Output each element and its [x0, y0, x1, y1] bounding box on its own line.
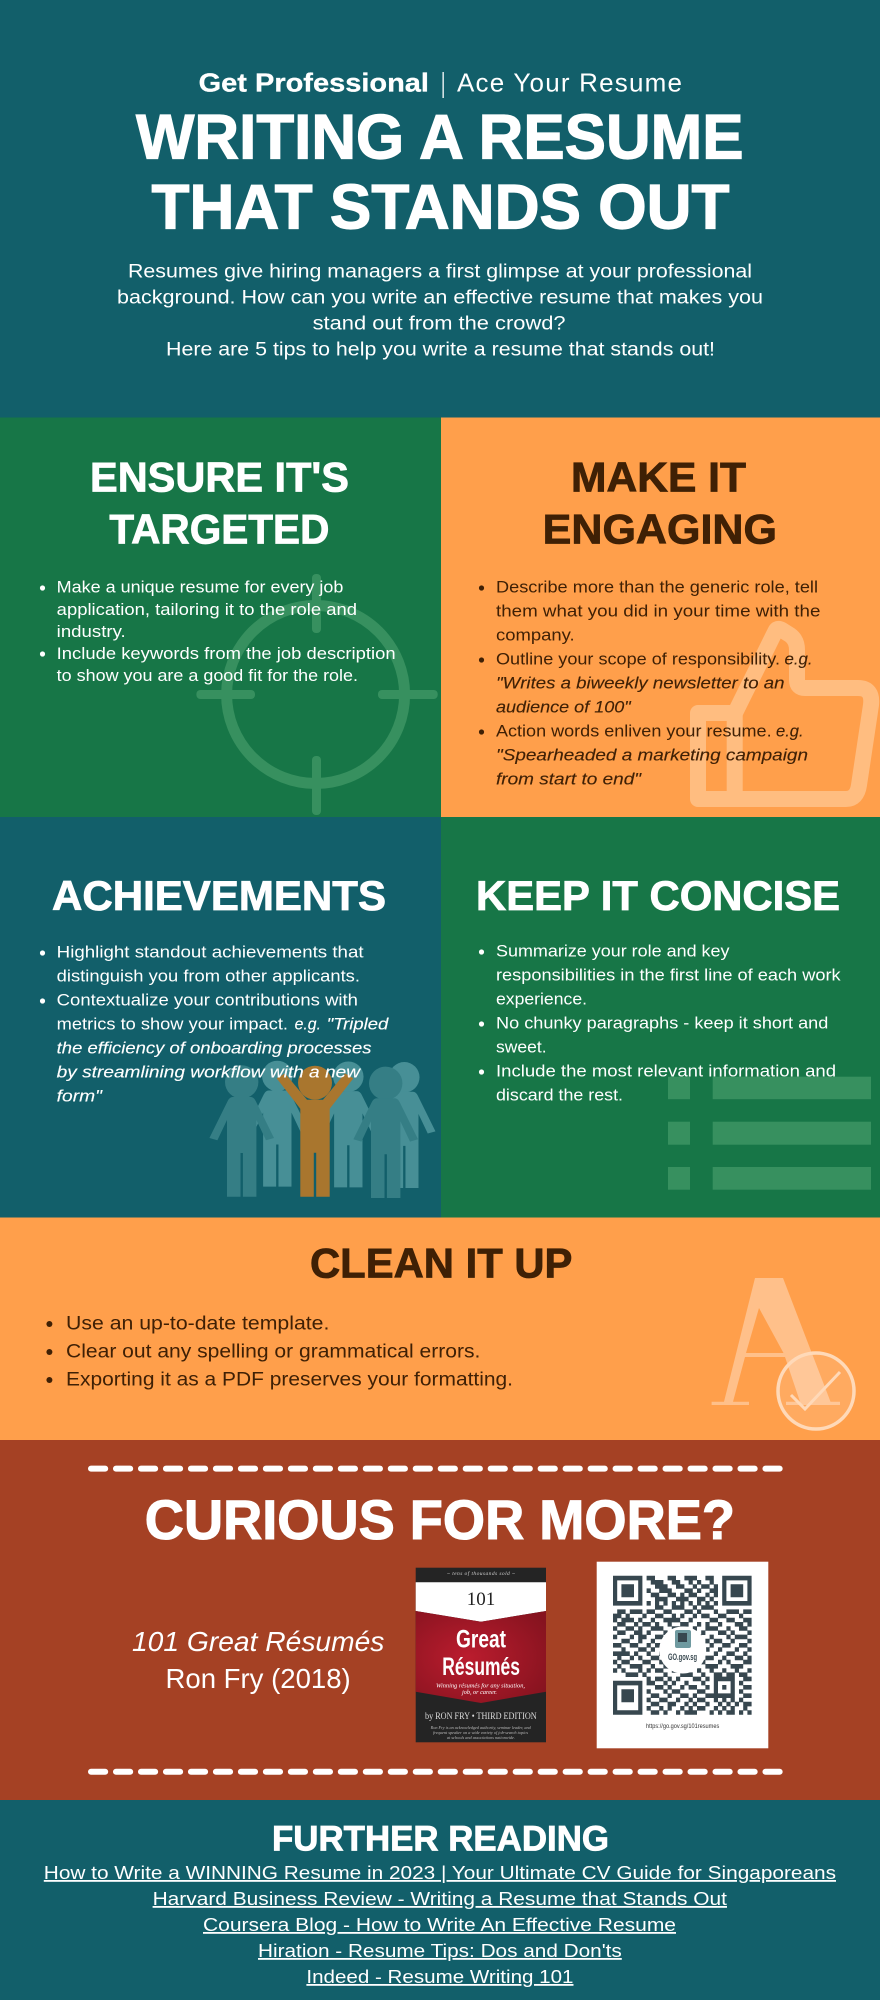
heading: FURTHER READING — [272, 1820, 609, 1859]
panel: make it engaging — [441, 418, 880, 817]
icon: group of people — [209, 1061, 435, 1198]
book cover: 101 — [467, 1589, 495, 1610]
bullet list: discard the rest. — [496, 1087, 623, 1105]
bullet list: by streamlining workflow with a new — [57, 1064, 361, 1082]
QR code card — [597, 1562, 768, 1748]
book cover: at schools and associations nationwide. — [447, 1735, 515, 1740]
bullet list: application, tailoring it to the role and — [57, 601, 357, 619]
links list: Hiration - Resume Tips: Dos and Don'ts — [258, 1941, 622, 1961]
heading: CURIOUS FOR MORE? — [145, 1488, 735, 1551]
panel: keep it concise — [441, 817, 880, 1218]
bullet list — [479, 943, 841, 1105]
links list: How to Write a WINNING Resume in 2023 | Your Ultimate CV Guide for Singaporeans — [44, 1863, 836, 1883]
QR code card: https://go.gov.sg/101resumes — [646, 1724, 719, 1730]
bullet list: industry. — [57, 623, 126, 641]
links list — [44, 1863, 836, 1987]
icon: letter A with check mark — [712, 1278, 854, 1429]
bullet list: Highlight standout achievements that — [57, 944, 364, 962]
kicker: Ace Your Resume — [457, 68, 682, 98]
bullet list: metrics to show your impact. — [57, 1016, 288, 1034]
bullet list: responsibilities in the first line of each work — [496, 967, 841, 985]
title: WRITING A RESUME — [136, 102, 744, 172]
heading: ENGAGING — [543, 505, 777, 552]
bullet list: from start to end" — [496, 771, 642, 789]
title: THAT STANDS OUT — [152, 172, 730, 242]
bullet list: Make a unique resume for every job — [57, 579, 343, 597]
panel: header — [0, 0, 880, 418]
intro text — [117, 262, 763, 360]
bullet list: the efficiency of onboarding processes — [57, 1040, 371, 1058]
heading: KEEP IT CONCISE — [476, 872, 840, 919]
panel: clean it up — [0, 1218, 880, 1440]
bullet list: distinguish you from other applicants. — [57, 968, 360, 986]
book cover: frequent speaker on a wide variety of job-search topics — [433, 1730, 528, 1735]
bullet list: Include keywords from the job description — [57, 645, 396, 663]
bullet list: "Tripled — [327, 1016, 389, 1034]
book cover: job, or career. — [461, 1689, 497, 1696]
bullet list: No chunky paragraphs - keep it short and — [496, 1015, 828, 1033]
book cover: Résumés — [442, 1653, 520, 1681]
bullet list: Include the most relevant information and — [496, 1063, 836, 1081]
heading: CLEAN IT UP — [310, 1240, 572, 1287]
panel: achievements — [0, 817, 441, 1218]
bullet list: Contextualize your contributions with — [57, 992, 358, 1010]
intro text: background. How can you write an effective resume that makes you — [117, 288, 763, 308]
title — [136, 102, 744, 242]
bullet list: Outline your scope of responsibility. — [496, 651, 780, 669]
book cover: ~ tens of thousands sold ~ — [447, 1570, 515, 1577]
book cover — [416, 1568, 546, 1742]
bullet list — [40, 944, 389, 1106]
heading — [543, 454, 777, 552]
links list: Harvard Business Review - Writing a Resume that Stands Out — [153, 1889, 727, 1909]
bullet list: "Writes a biweekly newsletter to an — [496, 675, 784, 693]
intro text: Resumes give hiring managers a first glimpse at your professional — [128, 262, 752, 282]
bullet list — [40, 579, 396, 685]
book cover: by RON FRY • THIRD EDITION — [425, 1711, 537, 1721]
bullet list: experience. — [496, 991, 587, 1009]
bullet list: sweet. — [496, 1039, 547, 1057]
bullet list: Use an up-to-date template. — [66, 1313, 329, 1334]
heading: MAKE IT — [571, 454, 746, 501]
heading: TARGETED — [109, 505, 329, 552]
bullet list: e.g. — [295, 1016, 321, 1034]
bullet list — [46, 1313, 513, 1390]
intro text: Here are 5 tips to help you write a resume that stands out! — [166, 339, 715, 360]
bullet list: "Spearheaded a marketing campaign — [496, 747, 808, 765]
heading: ACHIEVEMENTS — [52, 872, 386, 919]
kicker: Get Professional — [199, 68, 429, 98]
bullet list: e.g. — [776, 723, 804, 741]
bullet list: e.g. — [784, 651, 813, 669]
icon: target — [196, 574, 438, 815]
links list: Coursera Blog - How to Write An Effective Resume — [203, 1915, 676, 1935]
links list: Indeed - Resume Writing 101 — [306, 1967, 574, 1987]
bullet list: Clear out any spelling or grammatical errors. — [66, 1341, 480, 1362]
bullet list: them what you did in your time with the — [496, 603, 820, 621]
bullet list: Action words enliven your resume. — [496, 723, 772, 741]
bullet list: Exporting it as a PDF preserves your formatting. — [66, 1369, 513, 1390]
book citation: Ron Fry (2018) — [166, 1663, 351, 1694]
book cover: Ron Fry is an acknowledged authority, seminar leader, and — [430, 1725, 532, 1731]
QR logo: GO.gov.sg — [668, 1652, 697, 1662]
panel: curious for more — [0, 1440, 880, 1800]
panel: ensure it's targeted — [0, 418, 441, 817]
bullet list: to show you are a good fit for the role. — [57, 667, 358, 685]
heading: ENSURE IT'S — [90, 454, 349, 501]
QR logo — [659, 1626, 706, 1674]
bullet list: form" — [57, 1088, 103, 1106]
icon: list — [668, 1077, 871, 1190]
book citation — [132, 1626, 384, 1694]
icon: thumbs up — [698, 629, 871, 799]
kicker — [199, 68, 682, 98]
book cover: Winning résumés for any situation, — [436, 1682, 525, 1689]
book citation: 101 Great Résumés — [132, 1626, 384, 1657]
heading — [90, 454, 349, 552]
bullet list: company. — [496, 627, 575, 645]
intro text: stand out from the crowd? — [313, 313, 566, 334]
bullet list: Describe more than the generic role, tell — [496, 579, 818, 597]
book cover: Great — [456, 1626, 507, 1654]
bullet list — [479, 579, 820, 789]
bullet list: audience of 100" — [496, 699, 632, 717]
bullet list: Summarize your role and key — [496, 943, 730, 961]
panel: further reading — [0, 1800, 880, 2000]
